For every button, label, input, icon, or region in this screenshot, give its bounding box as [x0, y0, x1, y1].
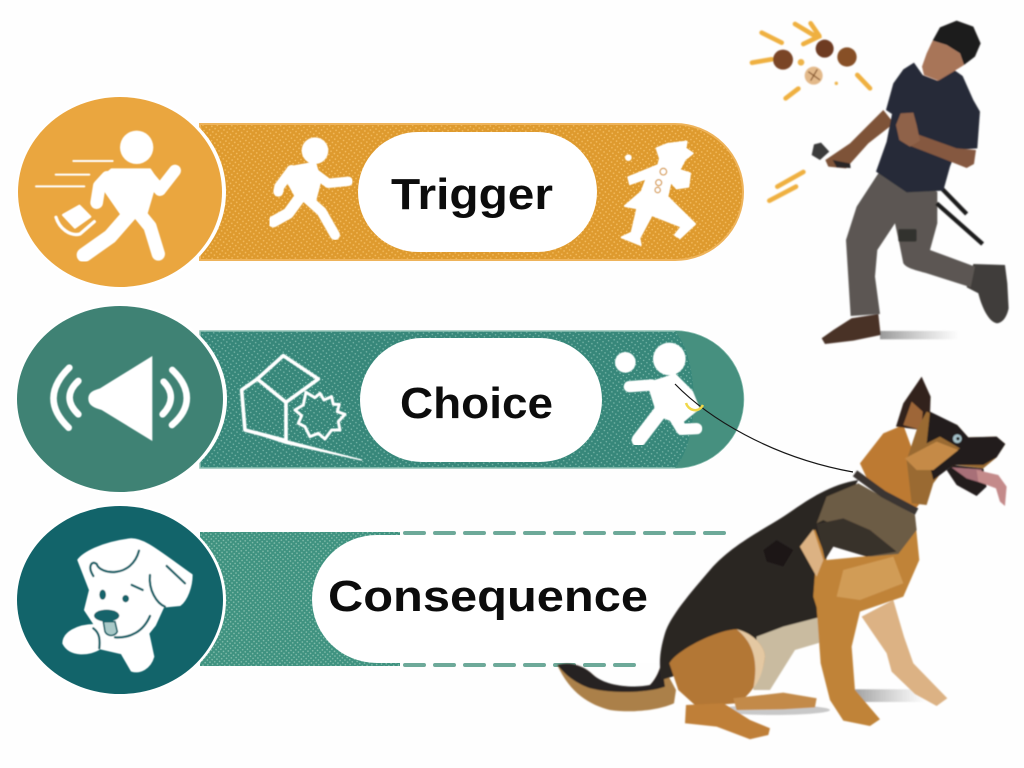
- haunch: [669, 629, 765, 707]
- fist: [896, 113, 920, 147]
- ground shadow: [717, 689, 927, 715]
- chest and shoulder tan: [800, 517, 919, 726]
- forearm: [911, 134, 976, 168]
- straps: [937, 187, 983, 244]
- illustration: German shepherd with leash: [557, 377, 1007, 739]
- hair: [933, 21, 981, 65]
- icon: walking figure with beads: [622, 142, 695, 245]
- open mouth: [947, 465, 987, 496]
- icon: runner in trigger circle: [16, 95, 226, 289]
- consequence banner: [200, 532, 400, 666]
- panel: choice row: [15, 304, 744, 494]
- leash clip glow: [686, 403, 703, 410]
- icon: puppy in consequence circle: [14, 504, 226, 696]
- head: [907, 412, 1005, 505]
- far foreleg: [862, 600, 947, 706]
- leash: [675, 384, 853, 472]
- hind feet: [685, 703, 770, 739]
- trousers: [846, 173, 975, 316]
- collar: [855, 473, 917, 512]
- heading: Choice: Choice: [400, 379, 553, 428]
- consequence label pill: [312, 535, 660, 663]
- chest highlight: [837, 557, 903, 600]
- illustration: man startled: [752, 21, 1009, 344]
- shoulder stripe: [817, 518, 897, 560]
- icon: speaker in choice circle: [15, 304, 227, 494]
- tail: [557, 663, 676, 711]
- icon: runner with ball: [615, 343, 698, 440]
- black patch: [763, 540, 793, 567]
- belly: [753, 617, 823, 690]
- dashed rails: [405, 533, 733, 665]
- leash handle: [812, 143, 829, 160]
- panel: trigger row: [16, 95, 743, 289]
- rear boot: [967, 264, 1009, 323]
- burst of treats: [752, 23, 870, 201]
- light shoulder fur: [800, 529, 823, 577]
- trigger label pill: [358, 132, 597, 252]
- grey ruff: [817, 483, 917, 557]
- heading: Trigger: Trigger: [391, 170, 553, 219]
- eye: [953, 434, 962, 443]
- neck: [860, 425, 928, 507]
- front shoe: [822, 314, 881, 344]
- choice banner: [200, 331, 744, 468]
- ear: [896, 377, 931, 430]
- choice banner solid end: [675, 331, 744, 468]
- trigger banner: [200, 124, 743, 260]
- icon: tilted house with gear: [242, 356, 362, 460]
- icon: small runner left: [273, 137, 348, 235]
- pocket: [898, 229, 917, 242]
- raised arm: [825, 110, 894, 168]
- muzzle and forehead: [927, 412, 1005, 480]
- tongue: [977, 470, 1007, 506]
- choice label pill: [360, 338, 602, 462]
- torso shirt: [876, 63, 980, 192]
- panel: consequence row: [14, 504, 733, 696]
- neck and face: [922, 41, 964, 81]
- man shadow: [880, 331, 960, 339]
- heading: Consequence: Consequence: [328, 572, 648, 621]
- dog body black: [660, 480, 858, 680]
